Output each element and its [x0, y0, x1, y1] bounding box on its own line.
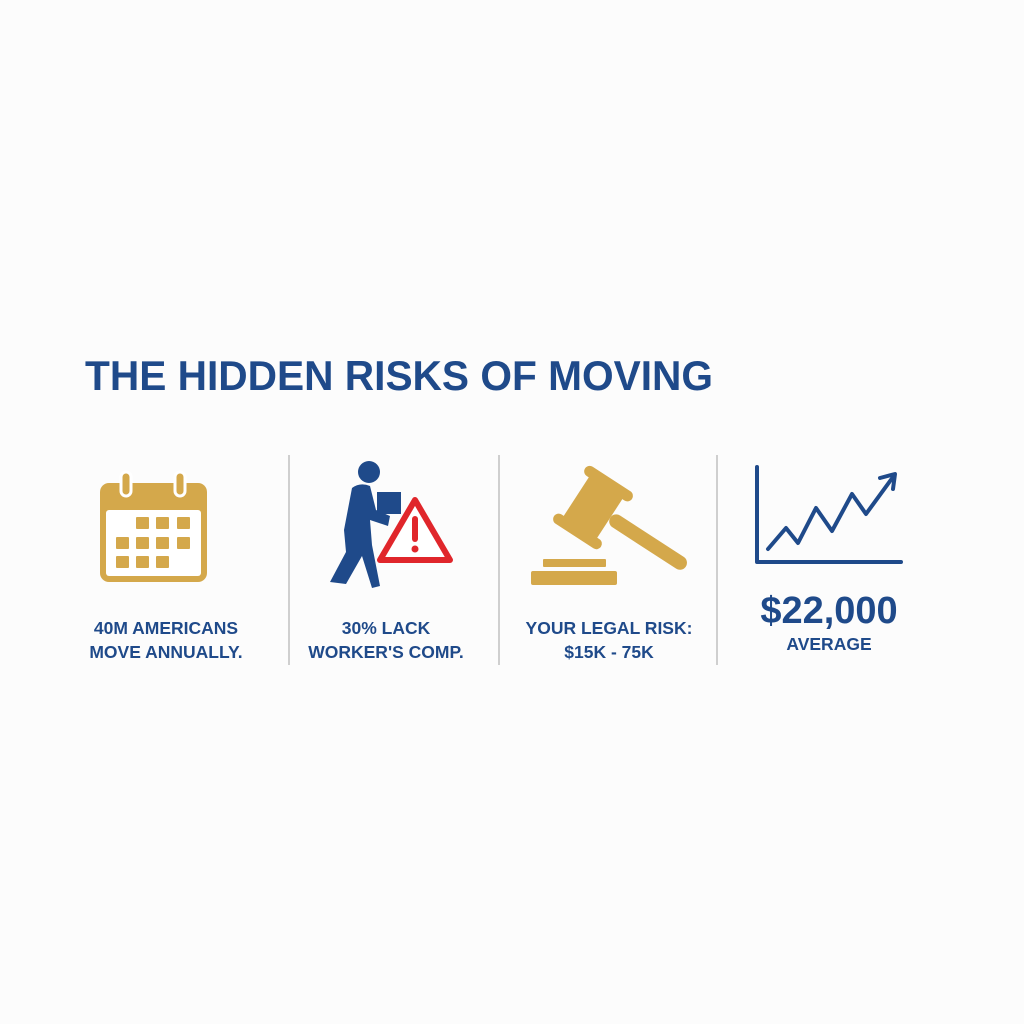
panel: average cost: [757, 467, 901, 654]
panel: movers: [89, 472, 243, 662]
panel: workers comp: [308, 461, 464, 662]
chart: rising line: [757, 467, 901, 562]
text: average: AVERAGE: [786, 634, 872, 654]
text: 30% lack: 30% LACK: [342, 618, 431, 638]
icon: calendar: [100, 472, 207, 582]
text: 40M americans: 40M AMERICANS: [94, 618, 238, 638]
icon: worker with warning: [330, 461, 450, 588]
panel: legal risk: [526, 464, 704, 662]
panel: workers comp: WORKER'S COMP.: [308, 642, 464, 662]
title: THE HIDDEN RISKS OF MOVING: [85, 352, 713, 399]
text: $22,000: $22,000: [760, 590, 898, 632]
icon: gavel: [531, 464, 704, 596]
panel: legal risk: $15K - 75K: [564, 642, 654, 662]
panel: movers: MOVE ANNUALLY.: [89, 642, 243, 662]
text: legal risk: YOUR LEGAL RISK:: [526, 618, 692, 638]
